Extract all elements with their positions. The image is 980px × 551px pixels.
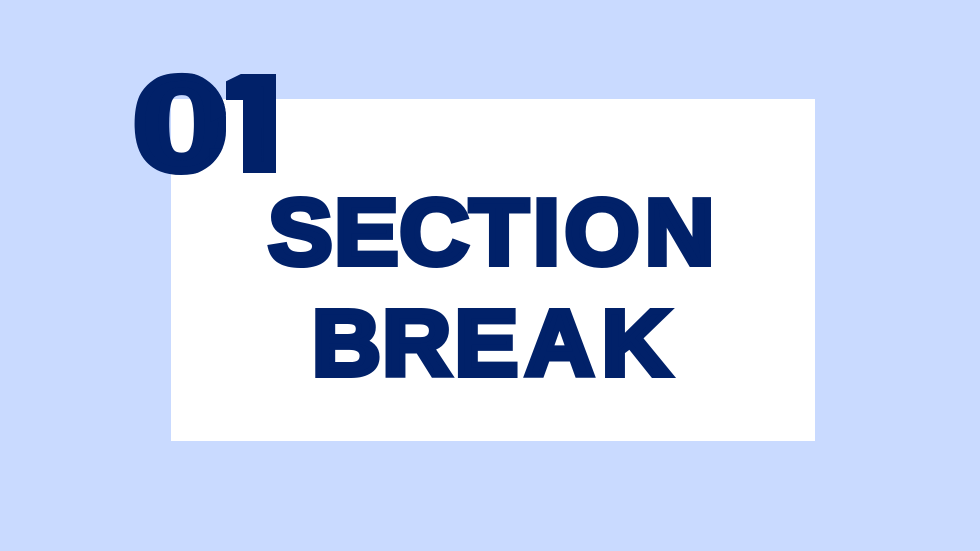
section break slide xyxy=(134,72,815,441)
section number: 1 xyxy=(209,50,307,199)
heading line: BREAK: BREAK xyxy=(312,291,671,395)
section number: 0 xyxy=(133,50,231,199)
heading line: SECTION: SECTION xyxy=(268,181,714,284)
white panel xyxy=(171,99,815,441)
section number xyxy=(134,72,276,175)
